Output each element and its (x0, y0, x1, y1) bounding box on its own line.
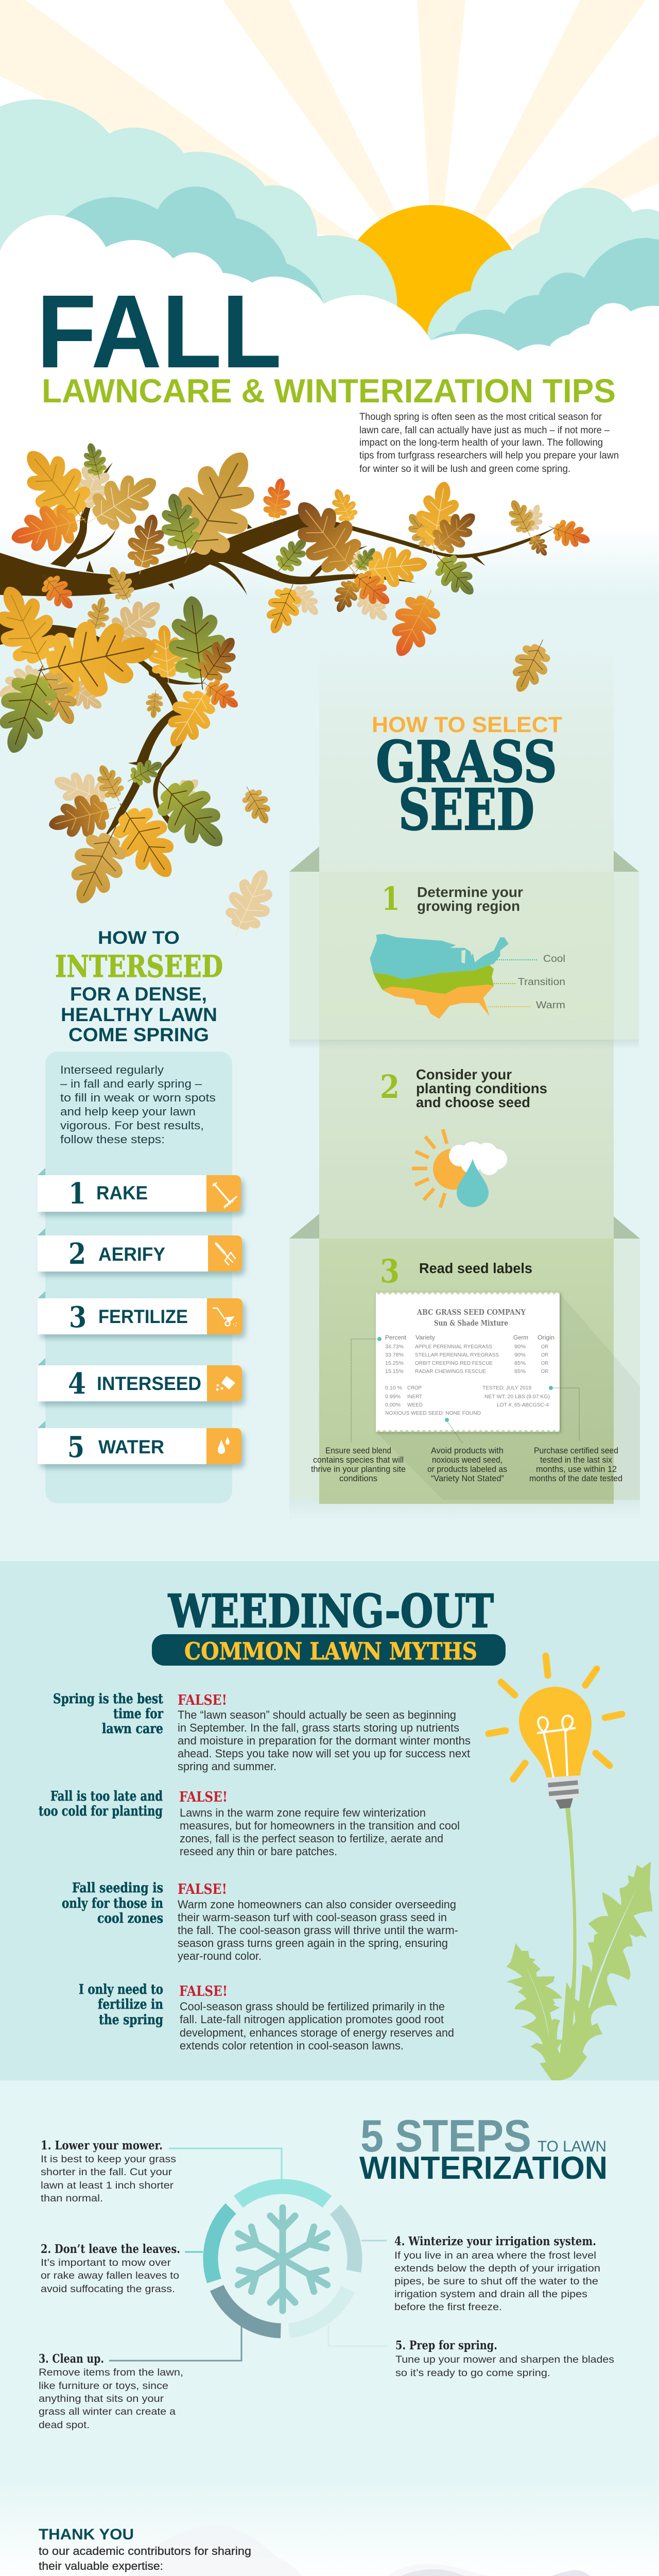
heading: how to interseed (55, 928, 223, 1045)
panel: step 3 read seed labels (311, 1252, 622, 1483)
myth 1: time for (113, 1706, 163, 1722)
step ribbon: 3 fertilize: 3 (69, 1300, 86, 1334)
heading: how to interseed: COME SPRING (68, 1024, 209, 1045)
callout text: noxious weed: or products labeled as (427, 1464, 507, 1474)
heading: 5 steps to lawn winterization (359, 2110, 608, 2186)
seed label receipt: CROP (407, 1385, 422, 1391)
icon: sun, cloud and water drop (412, 1129, 507, 1208)
grey clouds (0, 2569, 659, 2576)
panel: common lawn myths background (0, 1561, 659, 2080)
thank you block: THANK YOU (39, 2526, 134, 2543)
step 5 prep for spring: 5. Prep for spring. (395, 2338, 497, 2352)
callout text: noxious weed: Avoid products with (431, 1446, 504, 1455)
step 1 lower your mower: 1. Lower your mower. (41, 2139, 163, 2153)
myth 2 (39, 1789, 460, 1858)
myth 4: development, enhances storage of energy reserves and (180, 2026, 454, 2039)
seed label receipt: NOXIOUS WEED SEED: NONE FOUND (385, 1410, 481, 1416)
seed label receipt: Germ (513, 1335, 528, 1341)
chart: five segment ring (211, 2187, 355, 2331)
pale back clouds (126, 2526, 659, 2576)
text block: interseed intro: vigorous. For best results, (60, 1119, 204, 1132)
step ribbon: 4 interseed: INTERSEED (97, 1373, 201, 1394)
step ribbon: 3 fertilize (38, 1291, 242, 1334)
seed label receipt: 34.73% (385, 1344, 404, 1350)
intro text: Though spring is often seen as the most critical season for (359, 412, 602, 422)
seed label receipt: ABC GRASS SEED COMPANY (417, 1308, 526, 1317)
panel: step 2 planting conditions: Consider your (416, 1066, 512, 1082)
myth 1: FALSE! (178, 1692, 227, 1708)
header illustration: clouds (0, 99, 659, 412)
seed label receipt: 15.25% (385, 1360, 404, 1366)
step 2 don't leave the leaves: avoid suffocating the grass. (41, 2284, 175, 2295)
seed label receipt: ORBIT CREEPING RED FESCUE (415, 1360, 493, 1366)
step 1 lower your mower: than normal. (41, 2193, 103, 2204)
seed label receipt: 85% (514, 1368, 526, 1375)
seed label receipt: Variety (415, 1335, 435, 1341)
panel: step 2 planting conditions: 2 (380, 1068, 400, 1106)
panel: step 1 growing region (370, 880, 565, 1019)
seed label receipt: APPLE PERENNIAL RYEGRASS (415, 1344, 492, 1350)
seed label receipt: INERT (407, 1394, 423, 1400)
step 4 winterize irrigation (394, 2234, 600, 2313)
step ribbon: 1 rake: 1 (68, 1177, 86, 1211)
step ribbon: 5 water: WATER (98, 1436, 164, 1458)
step 2 don't leave the leaves: or rake away fallen leaves to (41, 2270, 179, 2281)
footer landscape (0, 2526, 659, 2576)
step 4 winterize irrigation: If you live in an area where the frost level (394, 2250, 596, 2261)
callout text: seed blend: thrive in your planting site (311, 1464, 406, 1474)
myth 1: ahead. Steps you take now will set you up for success next (178, 1747, 470, 1760)
seed label receipt: 0.10 % (385, 1385, 402, 1391)
seed label receipt (376, 1292, 560, 1432)
intro text (359, 412, 619, 474)
intro text: impact on the long-term health of your lawn. The following (359, 437, 603, 448)
heading: 5 steps to lawn winterization: WINTERIZATION (359, 2150, 608, 2186)
step 2 don't leave the leaves: It’s important to mow over (41, 2258, 171, 2268)
callout text: seed blend: contains species that will (313, 1455, 404, 1465)
heading: how to interseed: INTERSEED (55, 949, 223, 984)
step ribbon: 2 aerify: 2 (68, 1237, 86, 1271)
icon: dandelion stem and leaves (506, 1807, 652, 2080)
myth 2: Fall is too late and (50, 1789, 163, 1804)
heading: 5 steps to lawn winterization: 5 STEPS (360, 2110, 531, 2161)
myth 1: in September. In the fall, grass starts storing up nutrients (178, 1721, 459, 1734)
seed label receipt: OR (541, 1352, 548, 1358)
seed label receipt: 33.78% (385, 1352, 404, 1358)
callout text: certified seed (529, 1446, 622, 1483)
myth 3: FALSE! (178, 1881, 227, 1897)
background: upper page (0, 0, 659, 1561)
header illustration: sun rays (0, 0, 659, 247)
intro text: lawn care, fall can actually have just as much – if not more – (359, 425, 610, 436)
seed label receipt: 0.00% (385, 1402, 401, 1408)
myth 3: cool zones (97, 1911, 163, 1926)
title: FALL (37, 273, 282, 389)
step ribbon: 5 water: 5 (67, 1430, 84, 1464)
seed label receipt: 90% (514, 1344, 526, 1350)
seed label receipt: STELLAR PERENNIAL RYEGRASS (415, 1352, 499, 1358)
icon: aerator fork (216, 1244, 235, 1265)
heading: how to interseed: HOW TO (98, 928, 180, 948)
icon: rake (213, 1183, 236, 1208)
step ribbon: 2 aerify (38, 1228, 242, 1272)
seed label receipt: 0.99% (385, 1394, 401, 1400)
myth 4 (79, 1982, 454, 2052)
legend: zone labels: Cool (543, 954, 565, 964)
step 4 winterize irrigation: pipes, be sure to shut off the water to the (394, 2276, 598, 2287)
myth 2: too cold for planting (39, 1804, 163, 1819)
step 4 winterize irrigation: before the first freeze. (394, 2302, 502, 2313)
seed label receipt: OR (541, 1360, 548, 1366)
myth 4: FALSE! (179, 1983, 228, 1999)
panel: interseed box (38, 1052, 242, 1503)
step 5 prep for spring: so it’s ready to go come spring. (395, 2368, 550, 2379)
myth 1: Spring is the best (53, 1691, 163, 1707)
callout text: noxious weed: “Variety Not Stated” (431, 1473, 504, 1483)
step ribbon: 3 fertilize: FERTILIZE (98, 1306, 188, 1327)
myth 1: lawn care (102, 1721, 163, 1737)
text block: interseed intro (60, 1063, 216, 1146)
myth 4: extends color retention in cool-season lawns. (180, 2039, 404, 2052)
step ribbon: 5 water (38, 1421, 241, 1464)
myth 3: Fall seeding is (72, 1880, 163, 1896)
oak leaves: lower branch (0, 575, 284, 945)
myth 3: only for those in (62, 1896, 163, 1911)
step 2 don't leave the leaves: 2. Don’t leave the leaves. (41, 2242, 180, 2256)
myth 2: zones, fall is the perfect season to fertilize, aerate and (180, 1832, 443, 1845)
step ribbon: 4 interseed: 4 (68, 1367, 86, 1401)
text block: interseed intro: and help keep your lawn (60, 1105, 196, 1118)
seed label receipt: 85% (514, 1360, 526, 1366)
myth 1: The “lawn season” should actually be seen as beginning (178, 1708, 456, 1721)
callout text: noxious weed (427, 1446, 507, 1483)
heading: weeding-out common lawn myths (152, 1584, 506, 1666)
panel: grass seed background column (289, 643, 640, 1520)
myth 3: year-round color. (178, 1950, 262, 1962)
oak leaves: upper branch (6, 435, 594, 699)
thank you block (39, 2526, 251, 2572)
step 3 clean up: grass all winter can create a (39, 2406, 176, 2417)
myth 4: Cool-season grass should be fertilized primarily in the (180, 2000, 445, 2013)
step 1 lower your mower: shorter in the fall. Cut your (41, 2167, 172, 2178)
tree branches (0, 463, 557, 839)
step 1 lower your mower: It is best to keep your grass (41, 2154, 176, 2165)
step 4 winterize irrigation: 4. Winterize your irrigation system. (394, 2234, 596, 2248)
heading: 5 steps to lawn winterization: TO LAWN (537, 2138, 606, 2155)
icon: light bulb (489, 1656, 622, 1810)
seed label receipt: 15.15% (385, 1368, 404, 1375)
myth 2: measures, but for homeowners in the transition and cool (180, 1819, 460, 1832)
step 3 clean up (39, 2352, 183, 2431)
seed label receipt: Sun & Shade Mixture (434, 1318, 508, 1328)
callout text: seed blend: conditions (339, 1473, 377, 1483)
callout text: seed blend (311, 1446, 406, 1483)
panel: step 1 growing region: growing region (417, 898, 520, 914)
step 3 clean up: like furniture or toys, since (39, 2381, 168, 2392)
seed label receipt: Percent (385, 1335, 407, 1341)
title: LAWNCARE & WINTERIZATION TIPS (42, 372, 616, 410)
step ribbon: 4 interseed (38, 1358, 242, 1401)
heading: weeding-out common lawn myths: COMMON LAWN MYTHS (184, 1637, 477, 1665)
seed label receipt: 90% (514, 1352, 526, 1358)
panel: step 1 growing region: 1 (381, 880, 400, 918)
step 2 don't leave the leaves (41, 2242, 180, 2295)
seed label receipt: NET WT: 20 LBS (9.07 KG) (484, 1394, 550, 1400)
callout text: certified seed: Purchase certified seed (534, 1446, 618, 1455)
title (37, 273, 616, 410)
panel: step 2 planting conditions: planting conditions (416, 1080, 547, 1096)
thank you block: to our academic contributors for sharing (39, 2545, 251, 2557)
legend: zone labels (488, 954, 565, 1011)
myth 3: the fall. The cool-season grass will thrive until the warm- (178, 1924, 458, 1937)
callout text: certified seed: months of the date tested (529, 1473, 622, 1483)
myth 3: season grass turns green again in the spring, ensuring (178, 1937, 448, 1950)
text block: interseed intro: Interseed regularly (60, 1063, 164, 1076)
chart: US growing zones map (370, 934, 509, 1019)
text block: interseed intro: to fill in weak or worn spots (60, 1091, 216, 1104)
intro text: tips from turfgrass researchers will help you prepare your lawn (359, 450, 619, 461)
myth 3 (62, 1880, 458, 1962)
legend: zone labels: Transition (518, 977, 565, 988)
seed label receipt: TESTED: JULY 2019 (482, 1385, 531, 1391)
step 3 clean up: Remove items from the lawn, (39, 2367, 183, 2378)
icon: sun (336, 205, 527, 396)
myth 1: and moisture in preparation for the dormant winter months (178, 1734, 471, 1747)
step ribbon: 1 rake (38, 1168, 241, 1212)
panel: step 3 read seed labels: 3 (380, 1252, 400, 1290)
callout text: certified seed: months, use within 12 (536, 1464, 617, 1474)
intro text: for winter so it will be lush and green come spring. (359, 464, 570, 474)
seed label receipt: LOT #: 65-ABCGSC-4 (497, 1402, 549, 1408)
myth 2: FALSE! (179, 1789, 228, 1805)
heading: how to select grass seed: HOW TO SELECT (372, 713, 562, 737)
panel: step 2 planting conditions (380, 1066, 547, 1208)
heading: weeding-out common lawn myths: WEEDING-OUT (168, 1584, 494, 1638)
heading: how to interseed: FOR A DENSE, (70, 984, 207, 1005)
panel: 5 steps background (0, 2080, 659, 2576)
step 4 winterize irrigation: extends below the depth of your irrigation (394, 2263, 600, 2274)
step 1 lower your mower (41, 2139, 176, 2204)
seed label receipt: OR (541, 1344, 548, 1350)
callout text: noxious weed: noxious weed seed, (432, 1455, 502, 1465)
myth 2: Lawns in the warm zone require few winterization (180, 1806, 426, 1819)
seed label receipt: Origin (537, 1335, 554, 1341)
callout text: seed blend: Ensure seed blend (325, 1446, 391, 1455)
text block: interseed intro: follow these steps: (60, 1133, 165, 1146)
step ribbon: 1 rake: RAKE (96, 1182, 148, 1204)
seed label receipt: RADAR CHEWINGS FESCUE (415, 1368, 486, 1375)
myth 1: spring and summer. (178, 1760, 276, 1773)
seed label receipt: WEED (407, 1402, 423, 1408)
seed label receipt: OR (541, 1368, 548, 1375)
myth 1 (53, 1691, 471, 1773)
step 4 winterize irrigation: irrigation system and drain all the pipes (394, 2289, 587, 2300)
myth 4: fall. Late-fall nitrogen application promotes good root (180, 2013, 444, 2026)
heading: how to select grass seed (372, 713, 562, 843)
connector lines (109, 2148, 388, 2361)
callout text: certified seed: tested in the last six (540, 1455, 612, 1465)
step 3 clean up: 3. Clean up. (39, 2352, 104, 2366)
panel: step 1 growing region: Determine your (417, 884, 523, 900)
icon: seed bag (216, 1376, 235, 1391)
myth 3: their warm-season turf with cool-season grass seed in (178, 1911, 447, 1924)
step 5 prep for spring: Tune up your mower and sharpen the blades (395, 2354, 614, 2365)
step 1 lower your mower: lawn at least 1 inch shorter (41, 2180, 174, 2191)
myth 4: fertilize in (98, 1997, 163, 2012)
panel: step 3 read seed labels: Read seed labels (419, 1260, 532, 1276)
heading: how to select grass seed: GRASS (376, 728, 557, 795)
myth 4: I only need to (79, 1982, 163, 1997)
panel: step 2 planting conditions: and choose seed (416, 1094, 530, 1110)
step 3 clean up: dead spot. (39, 2420, 90, 2431)
step 3 clean up: anything that sits on your (39, 2394, 164, 2404)
myth 4: the spring (99, 2012, 163, 2028)
icon: spreader cart (213, 1308, 237, 1326)
heading: how to select grass seed: SEED (398, 776, 534, 843)
icon: water drops (218, 1436, 230, 1454)
thank you block: their valuable expertise: (39, 2560, 163, 2572)
text block: interseed intro: – in fall and early spring – (60, 1077, 202, 1090)
myth 3: Warm zone homeowners can also consider overseeding (178, 1898, 456, 1911)
legend: zone labels: Warm (536, 1000, 565, 1011)
heading: how to interseed: HEALTHY LAWN (61, 1004, 217, 1025)
step ribbon: 2 aerify: AERIFY (98, 1244, 165, 1265)
icon: snowflake (232, 2208, 334, 2311)
step 5 prep for spring (395, 2338, 614, 2379)
callout markers and leader lines (351, 1337, 579, 1444)
myth 2: reseed any thin or bare patches. (180, 1845, 337, 1858)
